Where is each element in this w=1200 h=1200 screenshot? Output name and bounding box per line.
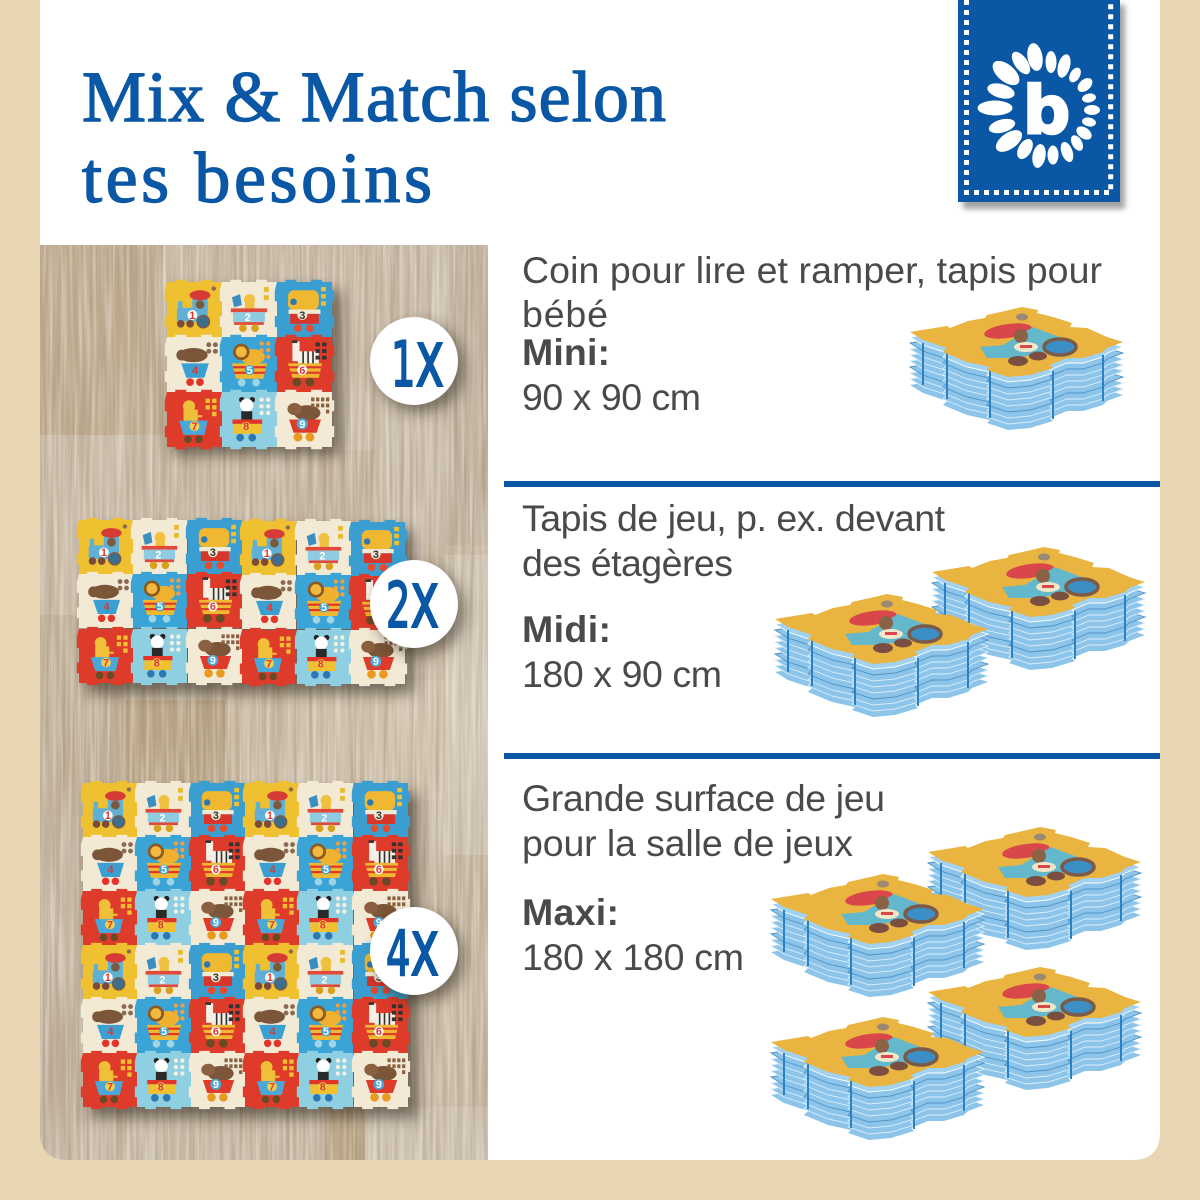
- mat 4x row 1: 3: [213, 810, 219, 822]
- section: mini text: bébé: [522, 293, 608, 335]
- mat 4x row 3: 7: [269, 919, 275, 931]
- mat 4x row 1: 2: [321, 812, 327, 824]
- mat 2x row 1: 2: [155, 549, 161, 561]
- mat 2x row 2: 5: [157, 601, 163, 613]
- mat 4x row 5: 6: [376, 1026, 382, 1038]
- mat 2x row 2: 5: [321, 602, 327, 614]
- mat 1x row 3: 7: [191, 421, 198, 433]
- badge: 1x: 1x: [391, 315, 444, 405]
- mat 1x row 2: [165, 335, 334, 394]
- mat 2x row 3: 7: [266, 658, 272, 670]
- mat 4x row 5: 5: [323, 1026, 329, 1038]
- section: midi text: Tapis de jeu, p. ex. devant: [522, 497, 946, 539]
- mat 2x row 1: [77, 518, 407, 578]
- mat 4x row 6: 9: [213, 1079, 219, 1091]
- logo letter b: b: [1023, 72, 1070, 149]
- mat: 4x (36 tiles): [81, 781, 418, 1118]
- mat 4x row 5: 4: [270, 1026, 276, 1038]
- mat 4x row 6: 9: [376, 1079, 382, 1091]
- mat 4x row 1: 1: [105, 810, 111, 822]
- mat: 1x (9 tiles): [165, 280, 342, 455]
- badge: 2x: [370, 556, 465, 656]
- mat 1x row 2: 5: [246, 365, 253, 377]
- section: maxi text: [522, 777, 885, 978]
- section: midi text: des étagères: [522, 542, 733, 584]
- mat 2x row 1: 3: [210, 547, 216, 559]
- mat 2x row 1: 1: [264, 548, 270, 560]
- badge: 4x: 4x: [386, 904, 439, 994]
- mat 2x row 3: 8: [154, 657, 160, 669]
- mat: 2x (18 tiles): [77, 518, 414, 694]
- mat 1x row 2: 6: [299, 365, 305, 377]
- mat 4x row 5: [81, 997, 410, 1055]
- title: tes besoins: [82, 138, 432, 218]
- mat 4x row 2: 4: [270, 864, 276, 876]
- mat 2x row 3: 9: [373, 656, 379, 668]
- logo petals: [978, 42, 1100, 169]
- mat 4x row 4: [81, 943, 410, 1001]
- section: mini text: Mini:: [522, 331, 610, 373]
- mat 4x row 6: 7: [107, 1081, 113, 1093]
- mat 4x row 6: 8: [320, 1081, 326, 1093]
- section: midi text: Midi:: [522, 608, 611, 650]
- mat 2x row 3: [77, 627, 407, 686]
- mat 4x row 1: [81, 781, 410, 839]
- section: maxi text: 180 x 180 cm: [522, 936, 744, 978]
- section: mini text: [522, 249, 1102, 418]
- mat 2x row 2: 6: [210, 601, 216, 613]
- mat 4x row 3: 9: [213, 917, 219, 929]
- mat 1x row 3: 9: [299, 419, 305, 431]
- section: maxi text: pour la salle de jeux: [522, 822, 853, 864]
- foam stacks: maxi: [771, 827, 1141, 1140]
- mat 2x row 2: 4: [267, 602, 273, 614]
- mat 2x row 1: 1: [101, 547, 107, 559]
- section: mini text: 90 x 90 cm: [522, 376, 701, 418]
- mat 4x row 4: 2: [159, 974, 165, 986]
- mat 4x row 5: 4: [108, 1026, 114, 1038]
- mat 2x row 1: 2: [319, 550, 325, 562]
- mat 4x row 6: 8: [158, 1081, 164, 1093]
- badge: 1x: [370, 315, 465, 413]
- section: midi text: [522, 497, 946, 695]
- section: maxi text: Maxi:: [522, 891, 619, 933]
- section: mini text: Coin pour lire et ramper, tapis pour: [522, 249, 1102, 291]
- mat 4x row 6: [81, 1051, 410, 1109]
- mat 4x row 4: 1: [267, 972, 273, 984]
- mat 4x row 3: [81, 889, 410, 947]
- mat 4x row 2: [81, 835, 410, 893]
- mat 4x row 2: 6: [213, 864, 219, 876]
- mat 1x row 1: 2: [245, 312, 251, 324]
- mat 4x row 4: 1: [105, 972, 111, 984]
- foam stack: mini: [910, 307, 1123, 430]
- mat 4x row 5: 6: [213, 1026, 219, 1038]
- mat 4x row 3: 7: [107, 919, 113, 931]
- mat 1x row 1: 3: [299, 310, 305, 322]
- mat 2x row 3: 8: [318, 658, 324, 670]
- foam stacks: midi: [775, 547, 1145, 717]
- mat 4x row 2: 5: [323, 864, 329, 876]
- section: midi text: 180 x 90 cm: [522, 653, 722, 695]
- title: [82, 57, 666, 218]
- mat 1x row 2: 4: [192, 365, 199, 377]
- mat 4x row 1: 1: [267, 810, 273, 822]
- mat 4x row 4: 2: [321, 974, 327, 986]
- mat 4x row 1: 2: [159, 812, 165, 824]
- mat 4x row 3: 8: [320, 919, 326, 931]
- mat 4x row 2: 5: [161, 864, 167, 876]
- mat 4x row 1: 3: [376, 810, 382, 822]
- section: maxi text: Grande surface de jeu: [522, 777, 885, 819]
- mat 2x row 3: 7: [103, 657, 109, 669]
- badge: 4x: [370, 904, 465, 1003]
- mat 2x row 3: 9: [210, 655, 216, 667]
- mat 4x row 3: 8: [158, 919, 164, 931]
- mat 1x row 1: [165, 280, 334, 339]
- mat 2x row 1: 3: [373, 549, 379, 561]
- mat 4x row 2: 4: [108, 864, 114, 876]
- mat 4x row 3: 9: [376, 917, 382, 929]
- logo tag: [958, 0, 1125, 209]
- mat 1x row 3: [165, 390, 334, 449]
- mat 4x row 4: 3: [213, 972, 219, 984]
- mat 4x row 5: 5: [161, 1026, 167, 1038]
- mat 2x row 2: 6: [373, 603, 379, 615]
- mat 2x row 2: [77, 572, 407, 632]
- badge: 2x: 2x: [386, 556, 439, 646]
- mat 4x row 2: 6: [376, 864, 382, 876]
- panel: wood floor: [40, 245, 488, 1160]
- mat 2x row 2: 4: [104, 601, 110, 613]
- mat 1x row 3: 8: [243, 421, 249, 433]
- mat 4x row 4: 3: [376, 972, 382, 984]
- mat 1x row 1: 1: [189, 310, 195, 322]
- title: Mix & Match selon: [82, 57, 666, 137]
- mat 4x row 6: 7: [269, 1081, 275, 1093]
- divider lines: [504, 481, 1160, 487]
